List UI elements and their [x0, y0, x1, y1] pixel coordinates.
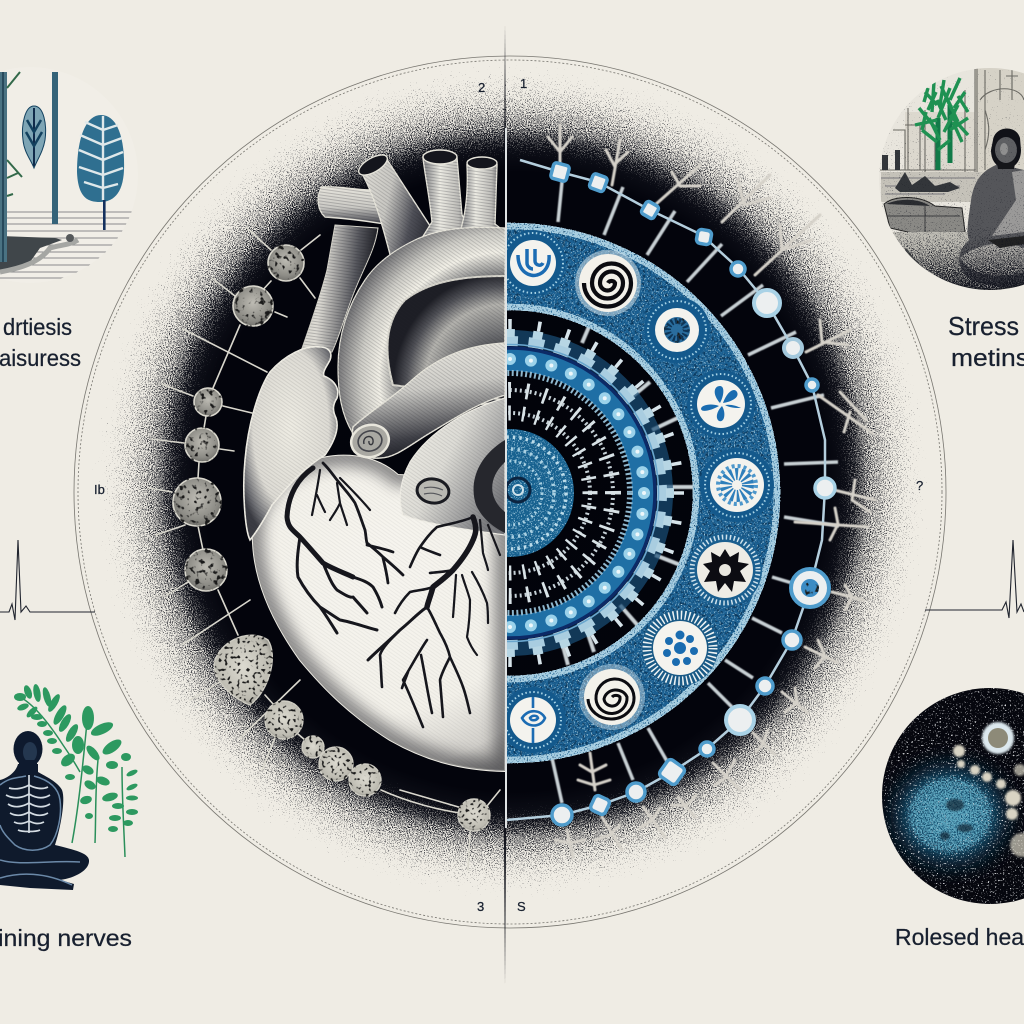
small axis marks: 2 — [478, 80, 485, 95]
vessel tube right — [460, 156, 500, 228]
vessel tube oblique — [358, 154, 430, 254]
star speckle — [882, 688, 1024, 904]
blue speckle — [894, 765, 1006, 865]
upright pole — [52, 72, 58, 224]
cross vessel — [352, 343, 505, 458]
inner mandala spikes — [507, 319, 684, 667]
inner arch — [387, 276, 505, 400]
vignette: star field (bottom right) — [882, 688, 1024, 904]
medallion: blue clover — [642, 610, 718, 686]
lower vessel opening — [415, 477, 451, 505]
outer double ring — [74, 56, 946, 928]
chain and tick lines — [149, 228, 500, 870]
monk figure — [959, 128, 1024, 287]
small axis marks: S — [517, 899, 526, 914]
green tree — [915, 78, 968, 170]
label: bottom left: ining nerves — [0, 925, 132, 951]
feathered spikes — [548, 125, 875, 857]
vessel tube horizontal — [318, 187, 385, 224]
small axis marks: 3 — [477, 899, 484, 914]
dark stippled disc — [82, 52, 942, 912]
great vessel column — [300, 225, 378, 354]
spokes to outer network — [552, 172, 839, 803]
big node cluster — [801, 579, 819, 597]
rock — [66, 234, 74, 242]
left nodule chain — [149, 228, 500, 870]
plants — [14, 684, 138, 857]
architecture — [880, 68, 1024, 202]
branches — [7, 72, 22, 196]
label: top right — [948, 311, 1024, 372]
left ECG trace — [0, 540, 95, 620]
medallion: black spiral — [575, 250, 641, 316]
label: top left — [0, 314, 81, 371]
engraving grain — [879, 68, 1024, 290]
vignette: meditating body with plants (bottom left) — [0, 684, 138, 890]
left half: anatomical heart — [244, 150, 505, 771]
path curve — [0, 240, 78, 272]
bright clusters — [953, 722, 1024, 857]
coronary vessels — [287, 463, 500, 727]
small axis marks: 1 — [520, 76, 527, 91]
mound — [0, 236, 62, 272]
label: top right: Stress — [948, 311, 1019, 341]
nodules — [173, 245, 304, 591]
ground lines — [0, 212, 132, 284]
medallion: wave glyph — [507, 230, 566, 296]
lower rim shading — [905, 250, 1024, 291]
right ECG trace — [925, 540, 1024, 618]
lower vessel shadow — [474, 440, 505, 533]
chain connecting outer nodes — [507, 160, 825, 820]
medallion: snowflake — [700, 448, 774, 522]
atrial appendage — [244, 347, 338, 540]
small axis marks: ? — [916, 478, 923, 493]
axis highlight over dark — [505, 128, 507, 828]
tree trunk — [0, 72, 7, 262]
label: bottom right: Rolesed hea — [895, 924, 1024, 950]
medallion: dark flower — [688, 533, 762, 607]
label: top right: metins — [951, 345, 1024, 372]
seated figure — [0, 731, 89, 890]
ventricle body — [253, 456, 505, 771]
lower vessel — [400, 398, 505, 535]
central vertical axis — [503, 24, 507, 985]
small leaf — [22, 106, 46, 168]
vessel tube centre — [422, 149, 464, 236]
leaf tree — [77, 115, 124, 230]
car — [884, 197, 965, 236]
small axis marks — [94, 76, 923, 914]
cross vessel opening — [350, 424, 390, 458]
medallion: pinwheel — [687, 370, 755, 438]
nebula dark pockets — [940, 799, 973, 840]
ground engraving — [881, 232, 985, 290]
lower pitted nodules — [214, 635, 490, 831]
central dotted disc — [507, 429, 574, 557]
outer network nodes — [550, 162, 835, 825]
small axis marks: Ib — [94, 482, 105, 497]
medallion: maze spiral — [579, 664, 645, 730]
right half: blue mandala — [507, 123, 878, 858]
aortic arch — [338, 227, 505, 432]
vignette: forest (top left) — [0, 212, 132, 278]
vignette: meditating monk in plaza (top right) — [879, 68, 1024, 291]
medallion: eye glyph — [507, 687, 566, 753]
nebula glow — [898, 769, 1002, 861]
blue band — [507, 222, 780, 764]
label: top left: aisuress — [0, 345, 81, 371]
plaza figures — [882, 150, 960, 192]
medallion: dotted cluster — [644, 297, 710, 363]
label: top left: drtiesis — [3, 314, 72, 340]
